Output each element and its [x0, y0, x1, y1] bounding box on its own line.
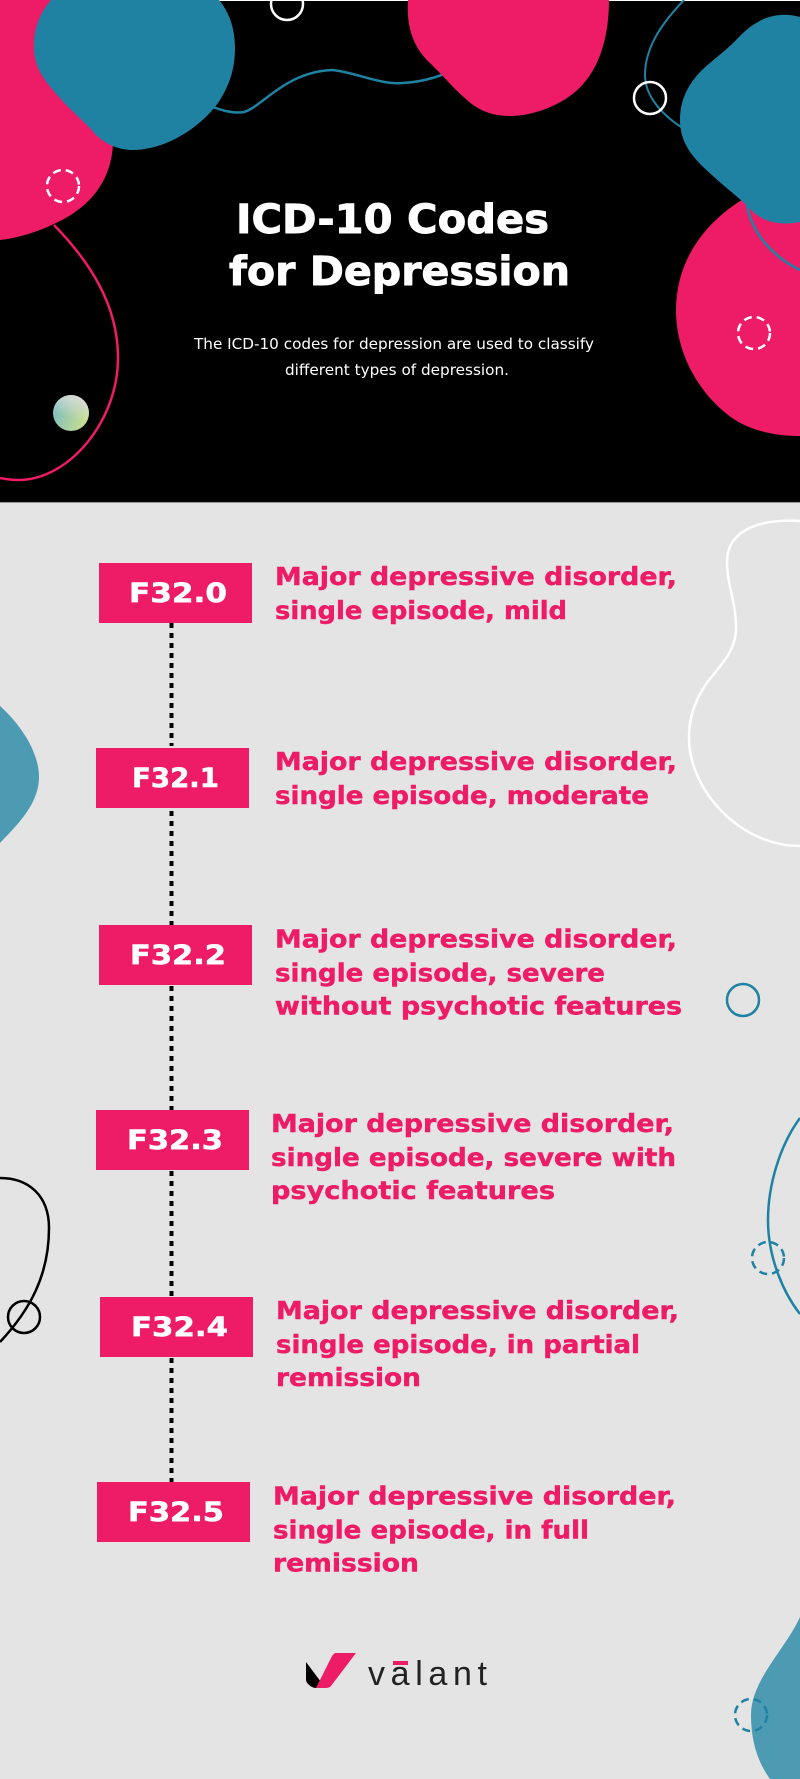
blob: pink right: [676, 195, 800, 436]
line: teal arc right: [645, 0, 684, 127]
title: for Depression: [229, 249, 570, 295]
item: F32.0: F32.0: [129, 578, 227, 609]
item: F32.4: single episode, in partial: [276, 1330, 640, 1359]
blob: teal left: [0, 706, 39, 843]
item: F32.2: F32.2: [130, 940, 226, 971]
icon: teal dashed ring: [752, 1242, 784, 1274]
blob: teal right: [680, 15, 800, 223]
subtitle: [193, 335, 594, 379]
item: F32.4: remission: [276, 1363, 421, 1392]
item: F32.4: Major depressive disorder,: [276, 1296, 679, 1325]
item: F32.1: [96, 747, 677, 810]
decorations: lower panel: [0, 521, 800, 1779]
line: pink thin circle: [0, 225, 118, 480]
item: F32.5: F32.5: [128, 1497, 224, 1528]
item: F32.1: single episode, moderate: [275, 781, 649, 810]
item: F32.0: [99, 562, 677, 625]
icon: black ring: [8, 1301, 40, 1333]
item: F32.3: F32.3: [127, 1125, 223, 1156]
line: white curve: [689, 521, 800, 846]
icon: dashed ring right: [738, 317, 770, 349]
title: [229, 197, 570, 295]
logo: valant: [306, 1653, 488, 1693]
icon: white ring right: [634, 82, 666, 114]
icon: teal dashed ring bottom: [735, 1699, 767, 1731]
item: F32.5: Major depressive disorder,: [273, 1482, 676, 1510]
blob: teal bottom right: [751, 1617, 800, 1779]
subtitle: The ICD-10 codes for depression are used to classify: [193, 335, 594, 353]
line: black curve: [0, 1178, 49, 1342]
item: F32.3: single episode, severe with: [271, 1143, 676, 1172]
item: F32.3: Major depressive disorder,: [271, 1109, 674, 1138]
line: teal wave: [205, 66, 460, 113]
item: F32.0: single episode, mild: [275, 596, 567, 625]
item: F32.2: Major depressive disorder,: [275, 924, 677, 954]
item: F32.4: F32.4: [131, 1312, 228, 1343]
line: teal arc: [768, 1118, 800, 1314]
item: F32.1: Major depressive disorder,: [275, 747, 677, 776]
item: F32.3: psychotic features: [271, 1176, 555, 1205]
item: F32.2: without psychotic features: [275, 992, 682, 1020]
icon: dashed ring left: [47, 170, 79, 202]
item: F32.5: single episode, in full: [273, 1516, 589, 1544]
item: F32.5: remission: [273, 1548, 419, 1578]
item: F32.5: [97, 1482, 676, 1578]
item: F32.1: F32.1: [132, 763, 219, 794]
panel: header: [0, 0, 800, 503]
blob: pink top left: [0, 0, 113, 240]
blob: teal top left: [34, 0, 235, 150]
item: F32.2: [99, 924, 682, 1020]
item: F32.4: [100, 1296, 679, 1392]
icon: logo mark: [306, 1653, 356, 1688]
dotted timeline: [170, 623, 174, 1482]
item: F32.2: single episode, severe: [275, 958, 605, 988]
line: teal arc on pink: [747, 205, 800, 270]
icon: teal ring: [727, 984, 759, 1016]
item: F32.3: [96, 1109, 676, 1205]
icon: gradient ball: [53, 395, 89, 431]
title: ICD-10 Codes: [236, 197, 549, 243]
subtitle: different types of depression.: [285, 361, 509, 379]
icon: white ring top: [271, 0, 303, 20]
blob: pink top centre: [408, 0, 609, 116]
item: F32.0: Major depressive disorder,: [275, 562, 677, 591]
wordmark: vālant: [368, 1655, 488, 1693]
